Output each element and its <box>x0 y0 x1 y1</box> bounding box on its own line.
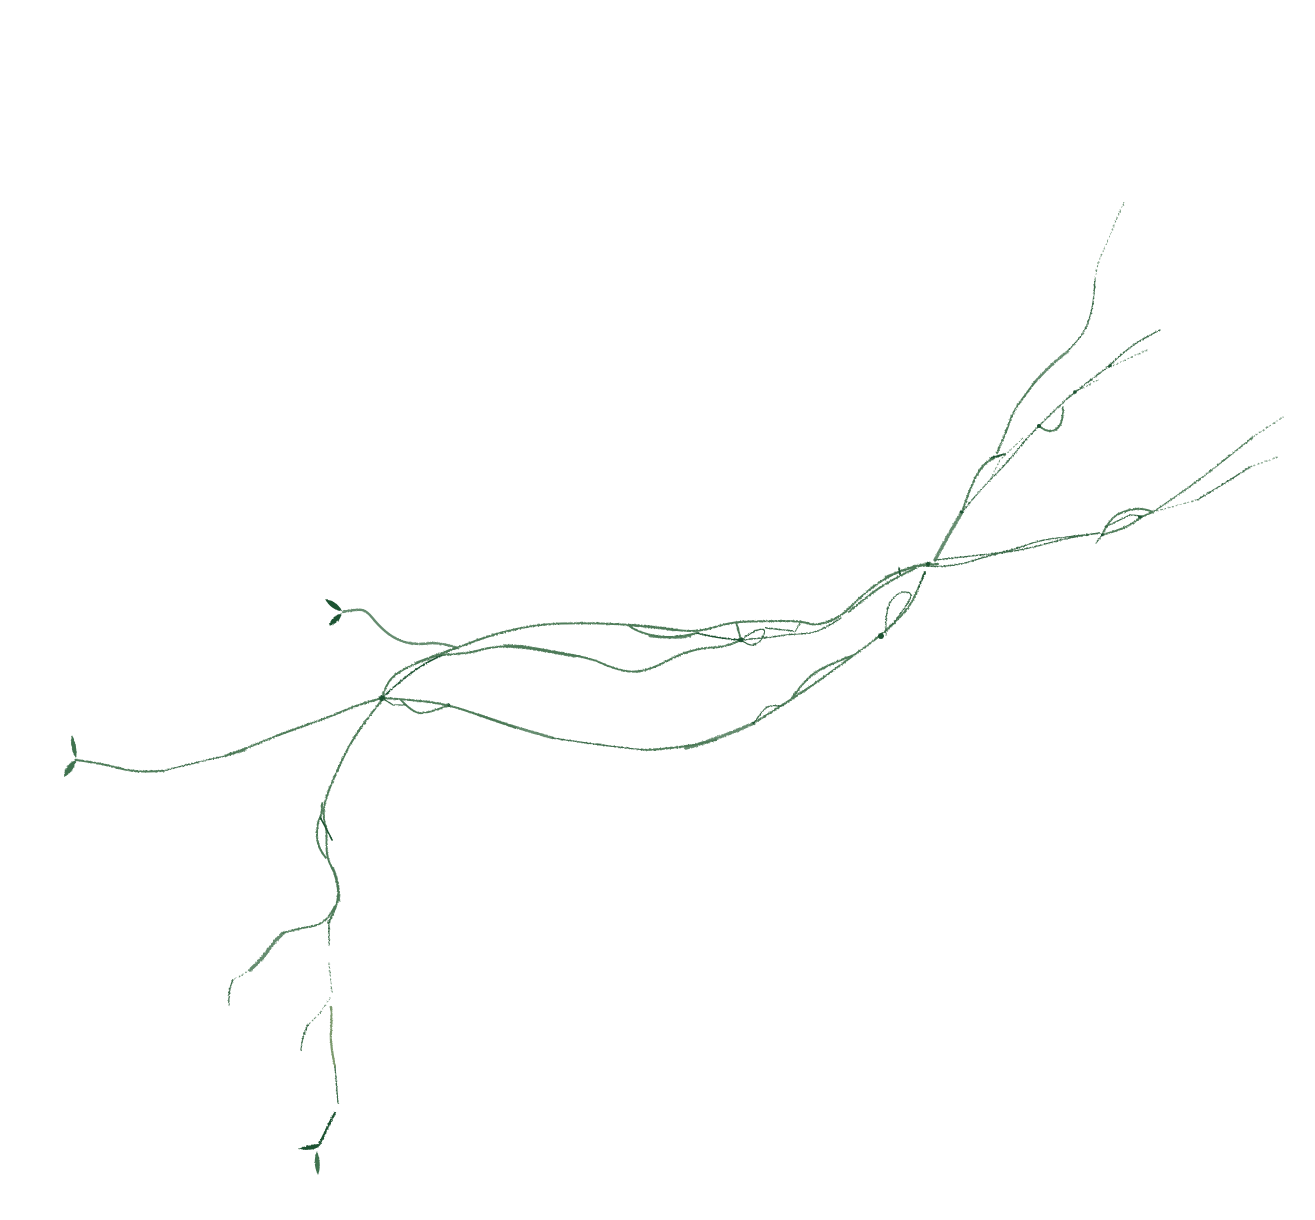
icon: sprout leaves bottom <box>298 1144 321 1175</box>
vine: bottom stem with sprout <box>298 920 338 1175</box>
vine: right branch <box>923 417 1283 566</box>
vine: top right branch <box>962 203 1124 512</box>
icon: sprout leaves top <box>325 599 342 626</box>
vine: upper arching stem <box>382 563 938 698</box>
vine: lower arching stem <box>382 568 925 750</box>
junction knots <box>379 364 1142 724</box>
vine: downward stem <box>317 700 382 923</box>
vine: top sprout tendril <box>325 599 458 648</box>
icon: sprout leaves left <box>64 735 76 777</box>
vine: second upper right branch <box>935 330 1160 560</box>
vine: lower left branch <box>229 902 337 1005</box>
vine: left stem <box>64 698 382 777</box>
vine: middle stem <box>443 618 841 672</box>
